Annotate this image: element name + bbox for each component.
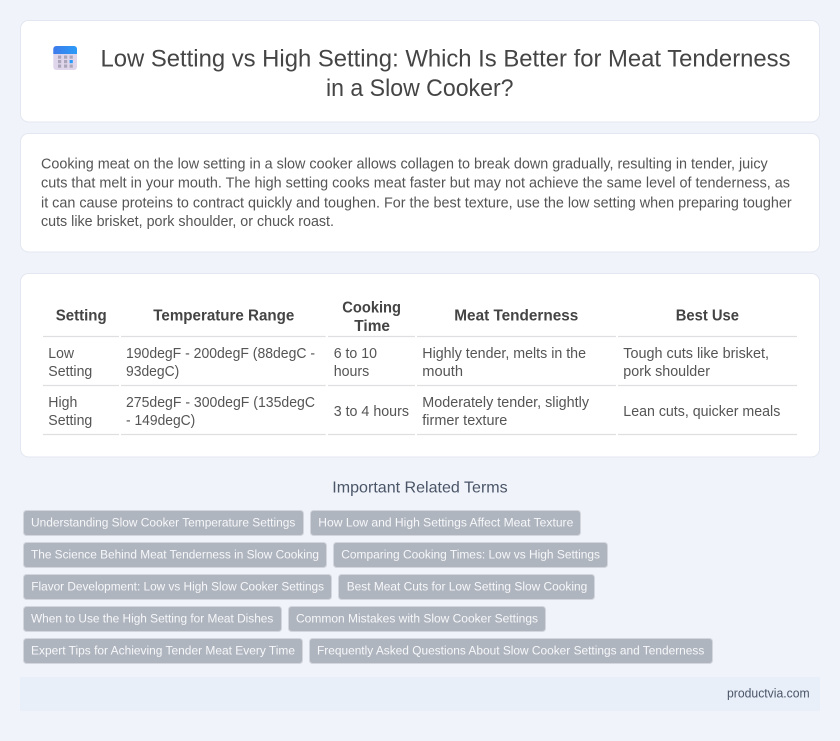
tag: faq: Frequently Asked Questions About Slow Cooker Settings and Tenderness <box>317 644 704 658</box>
table row: high setting <box>43 395 797 434</box>
table header row: Meat Tenderness <box>454 308 578 325</box>
text block: intro: it can cause proteins to contract quickly and toughen. For the best texture, use the low setting when preparing tougher <box>41 195 792 211</box>
table row: low setting: Low <box>48 346 75 362</box>
table row: low setting <box>43 346 797 386</box>
title: in a Slow Cooker? <box>326 75 514 102</box>
tag: settings and meat texture: How Low and High Settings Affect Meat Texture <box>318 516 574 530</box>
tag list: related terms <box>24 510 712 664</box>
icon: calendar <box>53 46 77 70</box>
table row: low setting: mouth <box>422 364 463 380</box>
text block: intro: Cooking meat on the low setting in a slow cooker allows collagen to break down gradually, resulting in tender, juicy <box>41 156 768 172</box>
panel: title header <box>20 20 820 122</box>
table row: high setting: firmer texture <box>422 413 507 429</box>
table row: low setting: Tough cuts like brisket, <box>623 346 769 362</box>
panel: intro paragraph <box>20 134 820 252</box>
heading: important related terms: Important Related Terms <box>332 480 508 497</box>
table header row <box>43 299 797 336</box>
tag: expert tips: Expert Tips for Achieving Tender Meat Every Time <box>31 644 295 658</box>
table row: low setting: 190degF - 200degF (88degC - <box>126 346 315 362</box>
tag: science of tenderness: The Science Behind Meat Tenderness in Slow Cooking <box>31 548 319 562</box>
text block: intro <box>41 156 792 230</box>
text block: intro: cuts like brisket, pork shoulder, or chuck roast. <box>41 214 334 230</box>
tag: flavor development <box>24 574 332 600</box>
tag: common mistakes <box>288 606 546 632</box>
tag: comparing cooking times <box>334 542 608 568</box>
panel: comparison table <box>20 274 820 457</box>
table header row: Cooking <box>342 299 401 316</box>
table row: high setting: Setting <box>48 413 92 429</box>
table row: high setting: 3 to 4 hours <box>334 404 409 420</box>
tag: expert tips <box>24 638 302 664</box>
title: Low Setting vs High Setting: Which Is Better for Meat Tenderness <box>100 46 790 73</box>
table header row: Setting <box>56 308 107 325</box>
table header row: Temperature Range <box>153 308 294 325</box>
tag: understanding temperature settings <box>24 510 304 536</box>
tag: common mistakes: Common Mistakes with Slow Cooker Settings <box>296 612 538 626</box>
footer <box>20 677 820 711</box>
table row: low setting: hours <box>334 364 369 380</box>
tag: flavor development: Flavor Development: Low vs High Slow Cooker Settings <box>31 580 324 594</box>
tag: science of tenderness <box>24 542 326 568</box>
footer: productvia.com <box>727 686 810 701</box>
table row: low setting: 6 to 10 <box>334 346 377 362</box>
table header row: Best Use <box>676 308 739 325</box>
table row: low setting: 93degC) <box>126 364 179 380</box>
title <box>100 46 790 102</box>
table header row: Time <box>354 318 390 335</box>
table row: low setting: pork shoulder <box>623 364 710 380</box>
table row: low setting: Highly tender, melts in the <box>422 346 586 362</box>
table row: low setting: Setting <box>48 364 92 380</box>
table row: high setting: Lean cuts, quicker meals <box>623 404 780 420</box>
tag: settings and meat texture <box>310 510 580 536</box>
text block: intro: cuts that melt in your mouth. The high setting cooks meat faster but may not achieve the same level of tenderness, as <box>41 176 790 192</box>
tag: understanding temperature settings: Understanding Slow Cooker Temperature Settings <box>31 516 295 530</box>
tag: when to use high: When to Use the High Setting for Meat Dishes <box>31 612 273 626</box>
table row: high setting: High <box>48 395 77 411</box>
table row: high setting: 275degF - 300degF (135degC <box>126 395 315 411</box>
tag: faq <box>310 638 712 664</box>
tag: when to use high <box>24 606 282 632</box>
table row: high setting: Moderately tender, slightly <box>422 395 590 411</box>
table row: high setting: - 149degC) <box>126 413 195 429</box>
tag: comparing cooking times: Comparing Cooking Times: Low vs High Settings <box>341 548 600 562</box>
tag: best meat cuts: Best Meat Cuts for Low Setting Slow Cooking <box>347 580 587 594</box>
tag: best meat cuts <box>338 574 594 600</box>
